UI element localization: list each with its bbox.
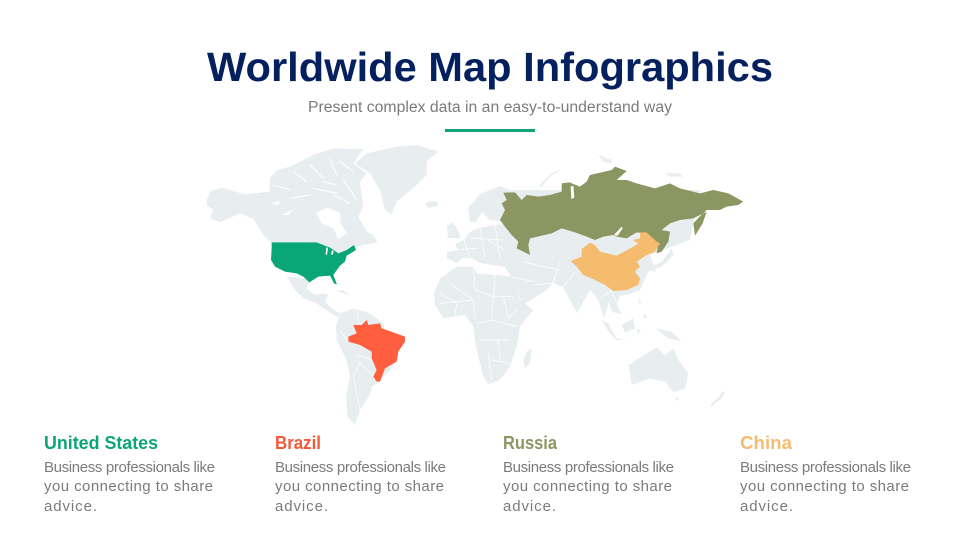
panel: China: [740, 433, 911, 515]
heading: China: China: [740, 433, 793, 453]
country: China: [571, 232, 660, 291]
land: Southeast Asia islands: [602, 298, 682, 342]
heading: Brazil: Brazil: [275, 433, 321, 453]
heading: Russia: Russia: [503, 433, 558, 453]
land: South America: [336, 308, 393, 425]
description: advice.: [740, 498, 793, 515]
description: [503, 459, 674, 515]
description: you connecting to share: [275, 478, 444, 495]
country: Brazil: [348, 320, 405, 382]
land: Africa: [434, 267, 533, 384]
panel: United States: [44, 433, 215, 515]
description: [275, 459, 446, 515]
description: you connecting to share: [44, 478, 213, 495]
country: United States: [271, 242, 356, 284]
description: Business professionals like: [740, 459, 911, 476]
land: Eurasia: [425, 155, 700, 318]
description: advice.: [44, 498, 97, 515]
description: advice.: [503, 498, 556, 515]
panel: Russia: [503, 433, 674, 515]
description: advice.: [275, 498, 328, 515]
land: Australia and New Zealand: [628, 347, 725, 407]
description: [44, 459, 215, 515]
description: Business professionals like: [503, 459, 674, 476]
land: North America: [207, 148, 437, 255]
land: Greenland: [355, 145, 438, 214]
heading: United States: United States: [44, 433, 158, 453]
title underline accent: [445, 129, 535, 132]
description: Business professionals like: [275, 459, 446, 476]
title: Worldwide Map Infographics: [207, 44, 773, 90]
subtitle: Present complex data in an easy-to-understand way: [308, 99, 672, 116]
country: Russia: [500, 167, 743, 255]
description: you connecting to share: [740, 478, 909, 495]
panel: Brazil: [275, 433, 446, 515]
description: Business professionals like: [44, 459, 215, 476]
description: [740, 459, 911, 515]
world map: [207, 145, 743, 425]
land: Mexico and Central America: [287, 276, 352, 317]
description: you connecting to share: [503, 478, 672, 495]
